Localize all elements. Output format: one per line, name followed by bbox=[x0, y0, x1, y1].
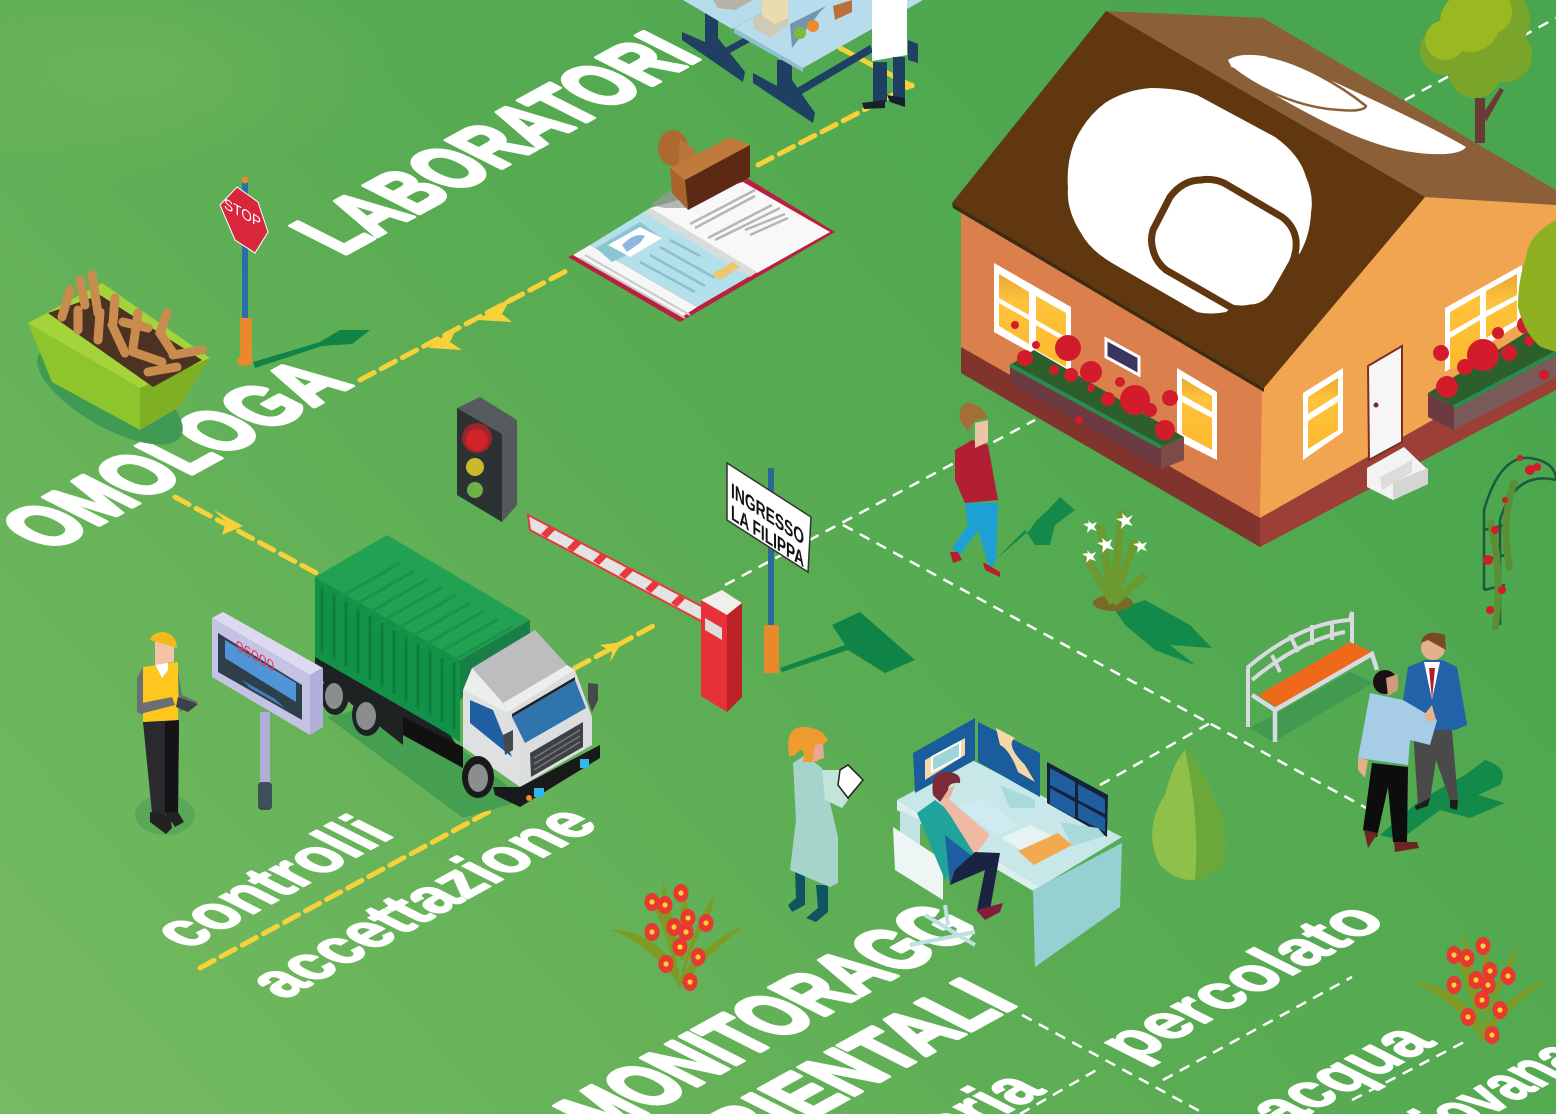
man in blue suit bbox=[1403, 633, 1467, 810]
logo on roof bbox=[1068, 88, 1312, 314]
tree top right bbox=[1420, 0, 1532, 143]
tree right edge bbox=[1518, 220, 1556, 352]
plant: red flowers left bbox=[610, 880, 746, 991]
plant: red flowers right bbox=[1412, 933, 1548, 1044]
lily plant bbox=[1082, 510, 1212, 665]
window: left 1 bbox=[994, 263, 1071, 375]
white dashed paths bbox=[725, 18, 1556, 1114]
window: right 1 bbox=[1303, 368, 1343, 460]
chair bbox=[893, 827, 975, 945]
icon: traffic light bbox=[457, 397, 517, 522]
window: right 2 bbox=[1445, 265, 1522, 372]
monitors bbox=[913, 718, 1108, 846]
icon: barrier bbox=[528, 515, 742, 712]
house bbox=[952, 11, 1556, 547]
lab instruments bbox=[713, 0, 852, 48]
shrub bbox=[1152, 750, 1225, 880]
icon: stop sign: STOP bbox=[224, 195, 261, 232]
container bbox=[315, 535, 530, 742]
person: nurse bbox=[788, 727, 863, 922]
icon: stamp and document bbox=[568, 130, 835, 322]
icon: entrance sign: LA FILIPPA bbox=[731, 501, 804, 572]
laboratory tables bbox=[682, 0, 923, 123]
rose trellis bbox=[1483, 455, 1556, 630]
door bbox=[1367, 346, 1428, 500]
icon: entrance sign: INGRESSO bbox=[731, 479, 804, 550]
flower box: right bbox=[1428, 316, 1556, 430]
flower box: left bbox=[1010, 321, 1184, 469]
roof bbox=[952, 11, 1556, 392]
scientist bbox=[862, 0, 907, 109]
icon: weighing display: 96000 bbox=[236, 637, 274, 676]
window: left 2 bbox=[1177, 368, 1217, 460]
icon: weighing display bbox=[212, 612, 323, 810]
label: percolato: percolato bbox=[1078, 893, 1403, 1069]
person: worker bbox=[135, 632, 198, 835]
woman walking bbox=[950, 403, 1075, 577]
label: controlli: controlli bbox=[131, 806, 411, 957]
icon: stop sign bbox=[220, 176, 370, 368]
bench bbox=[1247, 612, 1377, 742]
operator bbox=[917, 772, 1003, 920]
table legs bbox=[682, 12, 918, 123]
men talking bbox=[1358, 633, 1505, 852]
cab bbox=[462, 630, 600, 807]
desk with operator bbox=[893, 718, 1122, 967]
yellow dashed paths bbox=[175, 48, 912, 968]
man in light blue shirt bbox=[1358, 670, 1437, 852]
icon: waste skip bbox=[23, 275, 210, 464]
icon: entrance sign bbox=[727, 463, 915, 673]
label: accettazione: accettazione bbox=[227, 797, 615, 1007]
truck bbox=[315, 535, 600, 818]
